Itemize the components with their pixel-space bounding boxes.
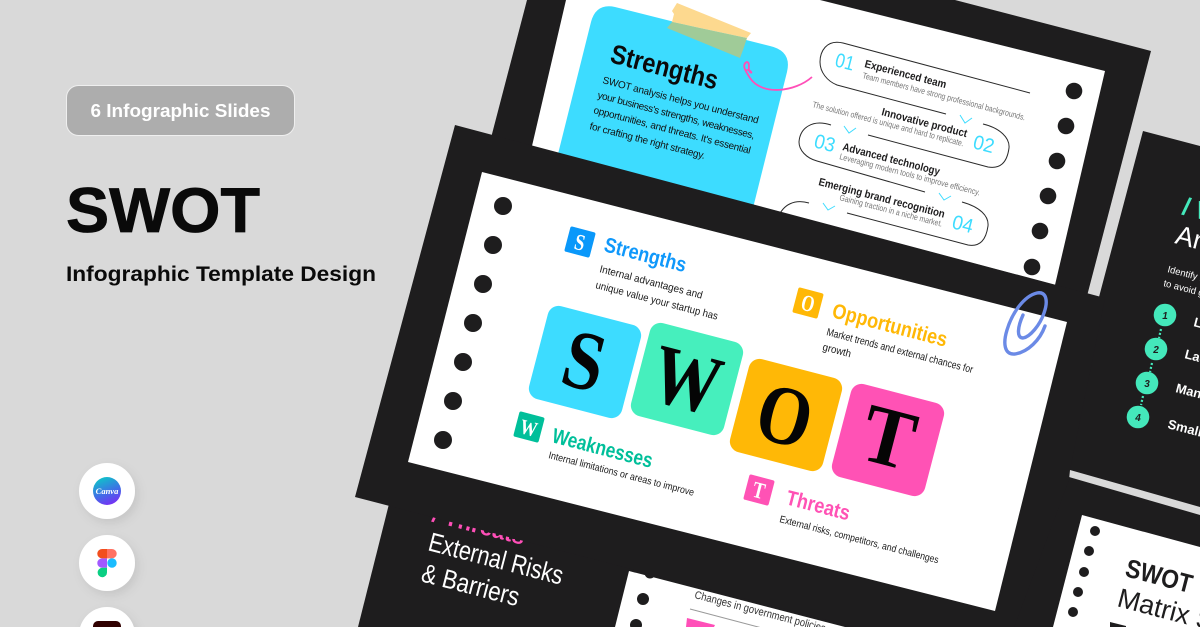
slide: strengths (top): [480, 0, 1151, 300]
card body: SWOT analysis helps you understand: [601, 75, 760, 126]
badge: 6 Infographic Slides: 6 Infographic Slides: [90, 100, 270, 121]
tape: [672, 3, 751, 38]
card title: Strengths: [607, 39, 721, 96]
weaknesses description: [1162, 264, 1200, 305]
subtitle: Infographic Template Design: [66, 262, 376, 286]
weaknesses label: [513, 411, 696, 499]
threats label: External risks, competitors, and challenges: [778, 514, 940, 566]
pill descriptions: Leveraging modern tools to improve efficiency.: [838, 151, 981, 197]
strengths label: S: [572, 229, 588, 256]
tile O: [727, 356, 845, 474]
slide: main SWOT: [355, 125, 1105, 627]
pill descriptions: Team members have strong professional backgrounds.: [861, 70, 1027, 122]
numbered list: 4: [1134, 413, 1141, 424]
process pills: [778, 42, 1030, 245]
threats subtitle: External Risks: [425, 527, 567, 591]
pink squiggle: [744, 62, 812, 90]
threats subtitle: [418, 527, 567, 612]
chevrons: [823, 115, 972, 210]
strengths label: [564, 226, 719, 323]
card body: for crafting the right strategy.: [588, 121, 706, 162]
pill numbers: 02: [971, 132, 997, 158]
weaknesses label: W: [517, 414, 540, 442]
slide: threats dark (bottom left): [358, 400, 1060, 627]
numbered list: 2: [1152, 345, 1159, 356]
strengths label: Strengths: [602, 234, 689, 277]
slide: weaknesses dark (right): [1060, 131, 1200, 507]
opportunities label: Market trends and external chances for: [825, 326, 975, 376]
pill titles: Experienced team: [863, 58, 948, 91]
icon: paperclip: [1005, 293, 1046, 354]
pill numbers: 01: [833, 50, 857, 76]
opportunities label: O: [798, 290, 817, 317]
threats label: T: [750, 477, 768, 504]
threats label: Threats: [784, 487, 852, 525]
icon: adobe app: [79, 607, 135, 627]
pill titles: Emerging brand recognition: [817, 176, 946, 221]
pill numbers: [812, 50, 997, 238]
opportunities label: [792, 287, 975, 376]
tile S: [526, 303, 644, 421]
pill numbers: 03: [812, 131, 838, 157]
icon: canva: Canva: [96, 486, 119, 496]
card body: opportunities, and threats. It's essential: [592, 105, 752, 157]
opportunities label: Opportunities: [830, 300, 950, 352]
pill titles: Advanced technology: [841, 141, 942, 178]
numbered list: 3: [1144, 379, 1150, 390]
pill titles: Innovative product: [880, 106, 969, 140]
threats subtitle: & Barriers: [418, 558, 523, 612]
punch holes: [434, 197, 512, 449]
threats heading: / Threats: [429, 501, 528, 551]
pill numbers: 04: [950, 212, 976, 238]
weaknesses label: Internal limitations or areas to improve: [547, 450, 696, 499]
icon: canva: [79, 463, 135, 519]
opportunities label: growth: [821, 341, 852, 360]
badge: 6 Infographic Slides: [66, 86, 294, 136]
strengths card: [549, 3, 788, 240]
card body: [588, 75, 760, 162]
tile T: [829, 380, 947, 499]
tile W: W: [642, 327, 731, 434]
pill descriptions: Gaining traction in a niche market.: [838, 192, 944, 229]
numbered list: [1127, 304, 1200, 440]
pill titles: [817, 58, 969, 221]
numbered list: 1: [1162, 311, 1168, 322]
slide: matrix (bottom right): [1000, 477, 1200, 627]
holes: [1024, 83, 1082, 275]
threats label: [743, 474, 940, 566]
strengths label: unique value your startup has: [594, 279, 719, 323]
tile T: T: [852, 386, 926, 489]
weaknesses label: Weaknesses: [550, 425, 655, 473]
strengths label: Internal advantages and: [598, 263, 704, 302]
icon: figma: [79, 535, 135, 591]
card body: your business's strengths, weaknesses,: [596, 90, 756, 142]
matrix table hint: [1110, 622, 1126, 627]
tile S: S: [553, 311, 615, 411]
slide: threats detail (bottom centre): [615, 568, 845, 627]
title: SWOT: [66, 176, 260, 246]
pill descriptions: The solution offered is unique and hard to replicate.: [811, 99, 965, 148]
tile O: O: [747, 364, 823, 468]
threat pink marker: [686, 618, 715, 627]
pill descriptions: [811, 70, 1027, 229]
